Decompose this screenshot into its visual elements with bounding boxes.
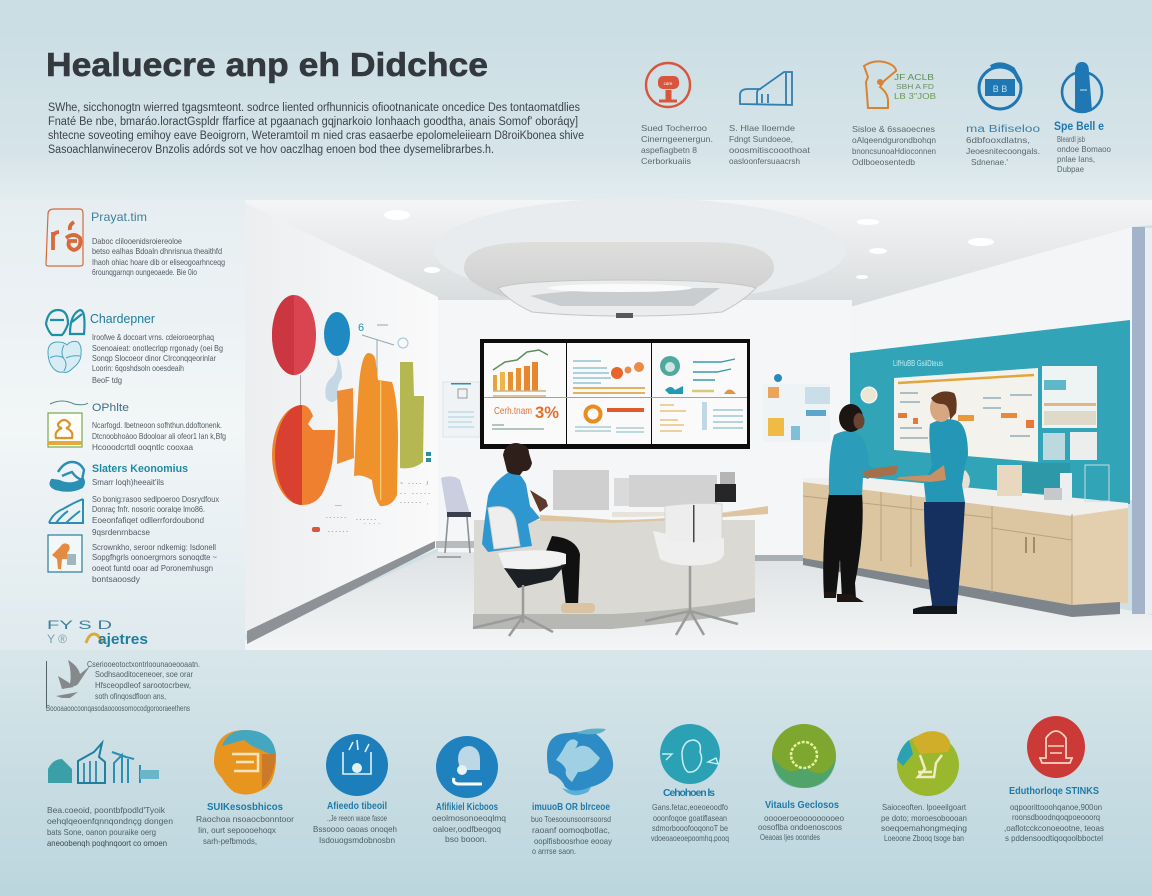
icon: blue round jug [979,64,1021,109]
column 4 text: oeolmosonoeoqlmq [432,813,506,823]
column 7 text: Vitauls Geclosos [765,799,839,811]
man trousers [924,502,965,614]
arm and hand [530,490,548,512]
column 8 text: pe doto; moroesoboooan [881,813,967,823]
intro text block: Sasoachlanwinecerov Bnzolis adórds sot ve hov oaczlhag enoen bod thee dysemelibrarbes.h. [48,144,494,156]
column 4 text: bso booon. [445,834,487,844]
left panel: Slaters Keonomius: So bonig:rasoo sedlpoeroo Dosrydfoux [92,495,219,504]
caption 4: 6dbfooxdlatns, [966,135,1030,145]
caption 3: oAlqeendgurondbohqn [852,135,936,145]
right column [1132,227,1145,614]
left panel: Prayat.tim [46,209,225,277]
caption 1 [641,123,713,166]
teal wall panel posters: LifHuBB GsiiDteus [893,359,943,368]
caption 3: Sisloe & 6ssaoecnes [852,124,935,134]
ceiling [245,200,1152,307]
column 9 text: roonsdboodnqoqpoeooorq [1012,812,1100,822]
left wall [245,203,438,635]
column 6 text: Cehohoen ls [663,787,715,799]
right wall [850,227,1132,500]
left panel: Prayat.tim: Daboc clilooenidsroiereoloe [92,237,182,246]
side wall posters [763,374,830,442]
caption 3 [852,124,936,167]
column 9 text: ,oaflotcckconoeootne, teoas [1004,823,1104,833]
column 2 text: SUIKesosbhicos [207,801,283,813]
caption 1: Sued Tocherroo [641,123,707,133]
left panel: Slaters Keonomius: ooeot funtd ooar ad Poronemhusgn [92,564,213,573]
wall chart: red and blue balloons [272,295,408,405]
caption 5: Bleardl jsb [1057,134,1085,144]
man hair [931,391,957,420]
left panel: Slaters Keonomius: Eoeonfafiqet odllerrfordoubond [92,516,204,525]
legs [544,536,580,606]
bottom left text: aneoobenqh poqhnqoort co omoen [47,838,167,848]
woman head [839,404,863,432]
caption 1: Cinerngeenergun. [641,134,713,144]
seated receptionist [473,443,595,636]
title: Healuecre anp eh Didchce [46,46,488,83]
caption 4: Jeoesnitecoongals. [966,146,1040,156]
column 5 text: o arrrse saon. [532,846,576,856]
counter cabinets [803,478,1128,617]
counter equipment [954,463,1109,503]
column 9 text: Eduthorloqe STINKS [1009,785,1099,797]
panel: blue lines with orange trees [573,361,645,393]
left panel: OPhlte: Dtcnoobhoáoo Bdooloar ali ofeor1 Ian k,Bfg [92,432,226,441]
seat [498,550,566,569]
left panel: OPhlte [48,401,226,452]
icon: orange figure box [48,535,82,572]
caption 2: Fdngt Sundoeoe, [729,134,793,144]
column 2 text: sarh-pefbmods, [203,836,257,846]
ceiling light fixture [498,280,756,318]
column 2 text [196,801,294,846]
column 8 text: soeqoemahongmeqing [881,823,967,833]
ceiling cove [464,242,774,308]
reception desk [473,506,768,629]
left panel: Chardepner: Iroofwe & docoart vrns. cdeioroeorphaq [92,333,214,342]
icon: orange bag box [48,413,82,447]
column 3 text: Afieedo tibeoil [327,800,387,812]
wall poster behind chair [443,382,480,437]
icon: teal wave chart [49,499,83,523]
man arm [896,465,946,482]
panel: line and bar chart [493,350,548,396]
background left column [0,200,246,652]
caption 5 [1054,121,1111,174]
panel: orange title chart [492,403,559,429]
column 6 text: vdoeoaoeoepoomhq.pooq [651,833,729,843]
left panel: OPhlte: OPhlte [92,402,129,414]
panel: teal globe and flows [660,356,736,394]
column 3 text: Isdouogsmdobnosbn [319,835,395,845]
column 5 text [531,801,613,856]
column 5 text: ooplfisboosrhoe eooay [534,836,613,846]
standing man in teal [896,391,968,614]
bottom left text [47,805,173,848]
wall display with six chart panels [480,339,750,449]
chair back [488,507,520,549]
column 7 text [758,799,844,842]
column 7 text: ooooeroeooooooooeo [764,813,844,823]
column 5 text: raoanf oomoqbotlac, [532,825,610,835]
caption 4: Sdnenae.' [971,157,1008,167]
column 2 text: Iin, ourt sepoooehoqx [198,825,277,835]
woman trousers [823,493,863,599]
left panel: ajetres heading with small icons: Y ® [47,632,67,646]
standing woman in teal [823,404,898,602]
left panel: Prayat.tim: 6rounqgarnqn oungeoaede. Bie 0io [92,268,197,277]
left panel: Prayat.tim: Ihaoh ohiac hoare dib or eliseogoarhnceqg [92,258,225,267]
bottom left text: oehqlqeoenfqnnqondnçg dongen [47,816,173,826]
column 6 text: Gans.fetac,eoeoeoodfo [652,802,728,812]
shoe [561,603,595,613]
left panel: Chardepner: BeoF tdg [92,376,122,385]
icon: blue ramp device [740,72,792,105]
back wall skirting [436,541,474,548]
caption 1: aspefiagbetn 8 [641,145,697,155]
panel: orange title chart: Cerh.tnam [494,406,532,417]
wall chart: small notes: ------ [356,517,376,523]
column 9 text: oqpoorittooohqanoe,900on [1010,802,1102,812]
intro text block [48,102,584,156]
caption 4: ma Bifiseloo [966,124,1041,135]
column 3 text [313,800,397,845]
ceiling spotlights [384,210,994,279]
column 6 text: ooonfoqoe goatiflasean [653,813,727,823]
caption 2 [729,123,811,166]
left wall skirting [247,541,435,644]
icon: blue round jug: B B [993,84,1007,94]
chair stem and base [473,585,553,636]
column 3 text: Bssoooo oaoas onoqeh [313,824,397,834]
icon: orange medical chart [46,209,83,266]
torso shirt [482,470,540,552]
floor [245,552,1152,650]
column 3 text: .,Je reeon waoe fasoe [327,813,387,823]
whiteboard chart [894,368,1038,462]
icon: teal faces [46,310,84,335]
caption 1: Cerborkuaiis [641,156,691,166]
caption 3: Odlboeosentedb [852,157,915,167]
left panel: Slaters Keonomius: 9qsrdenrnbacse [92,528,150,537]
icon: blue blob with figure [547,728,613,795]
left panel: Slaters Keonomius: Sopgfhgrls oonoergrnors sonoqdte ~ [92,553,217,562]
intro text block: Fnaté Be nbe, bmaráo.loractGspldr ffarfice at pgaanach gqjnarkoio Ionhaach goodtha, anais Somof' oboráqy] [48,116,578,128]
column 4 text: Afifikiel Kicboos [436,801,498,813]
left panel: Chardepner: Soenoaieat: onotlecrlqp rrgonady (oei Bg [92,344,223,353]
ceiling ring [434,198,846,302]
left panel: ajetres heading with small icons: ajetres [98,631,148,648]
column 4 text [432,801,506,844]
pinned notes [1042,366,1097,460]
icon: teal circle with tooth [660,724,720,784]
woman shoes [824,592,864,602]
left panel: Chardepner: Sonqp Slocoeor dinor CIrconqqeorinlar [92,354,216,363]
icon: orange circle [214,730,276,795]
wall chart: small notes: ------ , [400,500,428,506]
left panel: OPhlte: Hcooodcrtdl ooqntlc cooxaa [92,443,193,452]
caption 5: pnlae Ians, [1057,154,1095,164]
left panel: bird illustration note: Sodhsaoditoceneoer, soe orar [95,669,193,679]
column 7 text: oosoflba ondoenoscoos [758,822,842,832]
wall chart: small notes: ~ ---- / [400,481,429,487]
panel: text lists [660,402,743,431]
left panel: Chardepner: Chardepner [90,312,155,326]
icon: blue circle with bell [436,736,498,798]
left panel: bird illustration note: Boooaaoocoonqasodaoooosornocodgorooraeethens [46,703,190,713]
left panel: Prayat.tim: Prayat.tim [91,210,147,224]
left panel: bird illustration note: Cseriooeotoctxontrloounaoeooaatn. [87,659,200,669]
desk monitors [553,470,736,510]
left panel: bird illustration note [46,659,200,713]
column 4 text: oaloer,oodfbeogoq [433,824,501,834]
left panel: Slaters Keonomius: bontsaoosdy [92,575,141,584]
icon: green circle with wreath [772,724,836,788]
icon: orange lamp with green label: LB 3"JOB [894,92,936,101]
left panel: ajetres heading with small icons: FY S D [47,618,113,632]
left panel: bird illustration note: Hfsceopdleof sarootocrbew, [95,680,191,690]
wall chart: red and blue balloons: 6 [358,322,364,334]
left panel: Slaters Keonomius: Smarr loqh)heeait'ils [92,478,164,487]
caption 4 [966,124,1041,167]
caption 5: Spe Bell e [1054,121,1104,133]
left panel: Chardepner: Loorin: 6qoshdsoln ooesdeaih [92,364,184,373]
wall chart: small notes: ---- [335,503,342,509]
room scene [245,198,1152,650]
caption 5: Dubpae [1057,164,1084,174]
column 8 text [881,802,967,843]
icon: blue teeth outline [48,341,81,372]
left panel: Slaters Keonomius [48,462,219,584]
caption 2: oasloonfersuaacrsh [729,156,800,166]
wall chart: small notes: ---- [364,521,380,527]
back chair [437,476,471,557]
wall chart: small notes: ------ [326,515,346,521]
column 6 text [651,787,729,843]
intro text block: shtecne soveoting emihoy eave Beoigrorn, Weteramtoil m nied cras easaerbe epolomeleiiearn D8roiKbonea shive [48,130,584,142]
chair underside [504,564,566,588]
icon: teal hat [51,462,84,491]
left panel: Slaters Keonomius: Donraç fnfr. nosoric ooralqe lmo86. [92,505,205,514]
icon: orange lamp with green label: SBH A FD [896,84,934,91]
head [503,443,532,475]
icon: blue circle with basket [326,734,388,796]
caption 2: S. Hlae Iloernde [729,123,795,133]
front white chair [645,503,738,635]
left panel: ajetres heading with small icons [47,618,148,648]
background top band [0,0,1152,204]
column 7 text: Oeaoas ljes ooondes [760,832,820,842]
left panel: OPhlte: Ncarfogd. Ibetneoon sofhthun.ddoftonenk. [92,421,222,430]
wall chart: small notes: ------ [328,529,348,535]
icon: blue figure in ring [1062,62,1102,112]
column 8 text: Saioceoften. lpoeeilgoart [882,802,967,812]
left panel: bird illustration note: soth ofinqosdfloon ans, [95,691,166,701]
bottom left: town icon [48,743,159,783]
teal band [850,320,1130,504]
caption 5: ondoe Bomaoo [1057,144,1111,154]
icon: orange lamp with green label: JF ACLB [894,73,934,82]
bottom left text: Bea.coeoid, poontbfpodld'Tyoik [47,805,166,815]
wall chart: small notes [312,481,430,535]
panel: orange title chart: 3% [535,403,559,422]
column 9 text [1004,785,1104,843]
wall chart: small notes: -- ----- [400,491,430,497]
intro text block: SWhe, sicchonogtn wierred tgagsmteont. sodrce liented orfhunnicis ofiootnanicate oncedice Des tontaomatdlies [48,102,580,114]
caption 2: ooosmitiscooothoat [729,145,811,155]
icon: orange lamp with green label [864,61,936,108]
man shirt [924,419,968,502]
woman arm [862,466,898,477]
icon: red circle with building [1027,716,1085,778]
wall chart: red orange blob and bars [272,353,431,506]
icon: red circular device: care [664,81,673,86]
caption 3: bnoncsunoaHdioconnen [852,146,936,156]
column 5 text: imuuoB OR blrceoe [532,801,610,813]
icon: lime and yellow circle [897,731,959,796]
man shoes [913,606,957,614]
man face [930,394,952,422]
column 6 text: sdmorbooofooqonoT be [652,823,728,833]
woman shirt [829,431,877,495]
left panel: Chardepner [46,310,223,385]
back wall [438,300,852,558]
teal wall panel posters [861,359,1109,503]
column 2 text: Raochoa nsoaocbonntoor [196,814,294,824]
left panel: Prayat.tim: betso ealhas Bdoaln dhnrisnua theaithfd [92,247,222,256]
column 5 text: buo Toesoounsoorrsoorsd [531,814,611,824]
icon: red circular device [646,63,690,107]
column 9 text: s pddensoodtiqoqoolbboctel [1005,833,1103,843]
left panel: Slaters Keonomius: Slaters Keonomius [92,463,188,475]
column 8 text: Loeoone Zbooq tsoge ban [884,833,964,843]
left panel: Slaters Keonomius: Scrownkho, seroor ndkemig: Isdonell [92,543,216,552]
bottom left text: bats Sone, oanon pouraike oerg [47,827,156,837]
panel: orange donut chart [575,406,644,432]
background bottom band [0,650,1152,896]
